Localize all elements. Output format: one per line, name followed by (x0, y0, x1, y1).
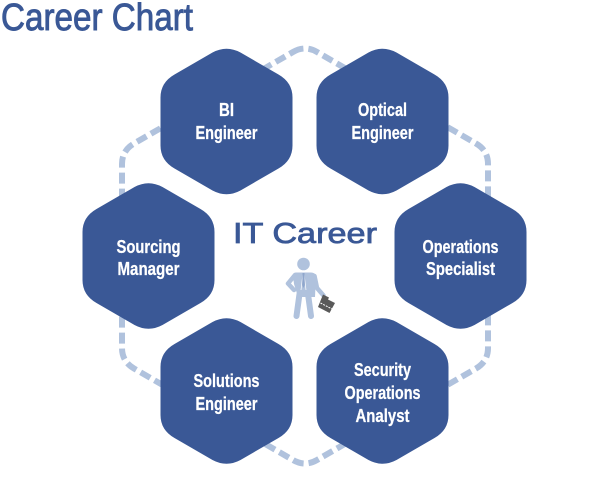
hexagon: BI Engineer: Engineer (196, 123, 258, 143)
hexagon: Sourcing Manager: Sourcing (116, 237, 180, 257)
center heading: IT Career (233, 218, 377, 250)
hexagon: Solutions Engineer: Solutions (194, 371, 260, 391)
hexagon: Optical Engineer: Engineer (352, 123, 414, 143)
hexagon: Operations Specialist: Operations (422, 237, 498, 257)
hexagon: BI Engineer (160, 49, 292, 194)
icon: businessman with briefcase (288, 258, 335, 316)
hexagon: Security Operations Analyst: Analyst (356, 406, 410, 426)
dashed hexagon ring (122, 48, 488, 464)
hexagon: BI Engineer: BI (219, 100, 234, 120)
hexagon: Sourcing Manager: Manager (118, 259, 180, 279)
hexagon: Optical Engineer: Optical (358, 100, 407, 120)
hexagon: Operations Specialist: Specialist (426, 259, 495, 279)
hexagon: Security Operations Analyst: Operations (344, 383, 420, 403)
hexagon: Security Operations Analyst: Security (354, 360, 411, 380)
hexagon: Operations Specialist (394, 183, 526, 329)
hexagon: Solutions Engineer (160, 318, 292, 464)
hexagon: Solutions Engineer: Engineer (196, 394, 258, 414)
hexagon: Sourcing Manager (82, 183, 214, 329)
hexagon: Optical Engineer (316, 49, 448, 194)
hexagon: Security Operations Analyst (316, 318, 448, 464)
